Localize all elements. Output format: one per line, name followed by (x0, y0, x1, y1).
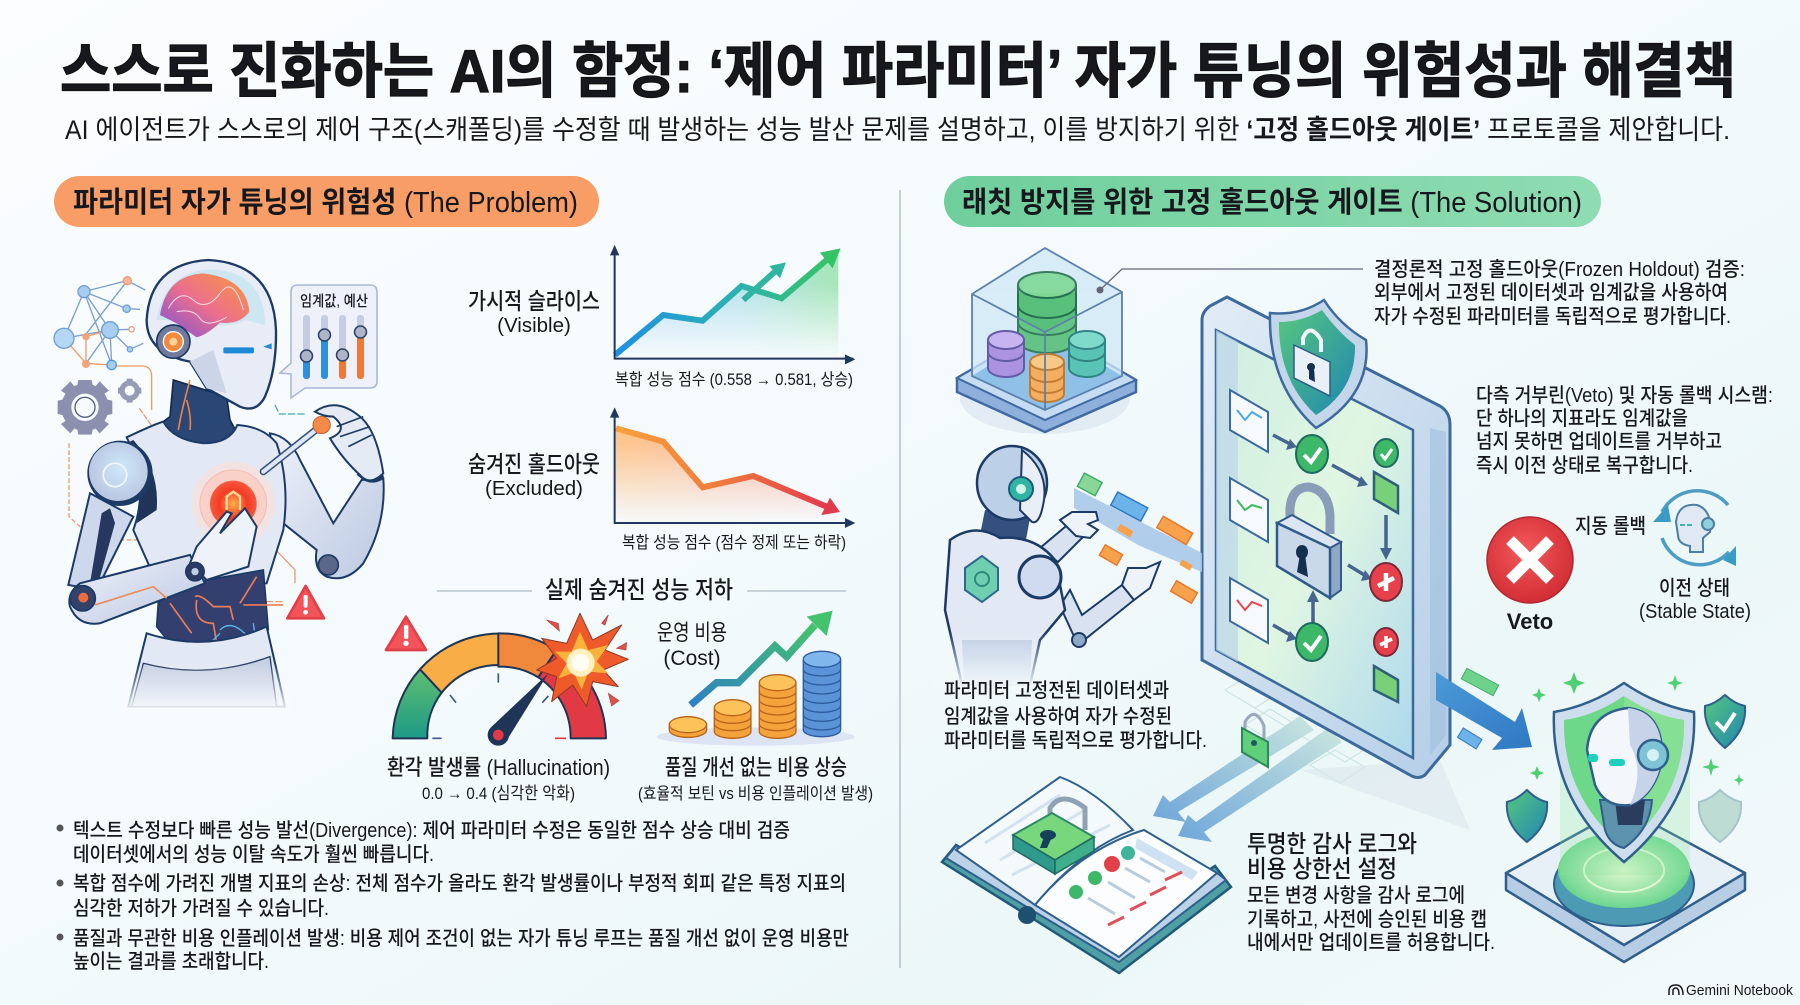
text block: audit log and cost cap: 모든 변경 사항을 감사 로그에 (1247, 884, 1465, 907)
chart: cost coins and rising arrow (657, 611, 855, 746)
text block: audit log and cost cap: 투명한 감사 로그와 (1247, 831, 1417, 858)
platform (1506, 808, 1745, 962)
lock on the page (1013, 799, 1094, 874)
text block: frozen holdout: 외부에서 고정된 데이터셋과 임계값을 사용하여 (1374, 281, 1728, 304)
illustration: audit log book (942, 777, 1231, 973)
near hand (190, 508, 257, 580)
text block: veto and rollback (1476, 384, 1773, 477)
coins: blue stack (803, 651, 841, 737)
database: orange cylinder (1030, 354, 1064, 402)
bottom fade (120, 663, 293, 713)
arm reaching low (1060, 585, 1134, 645)
label: hidden holdout: (Excluded) (485, 477, 583, 500)
reactor core (192, 462, 275, 545)
icon: small green lock (1242, 714, 1268, 767)
robot neck (980, 510, 1030, 545)
bullet 3 (56, 927, 849, 973)
coins: stack 2 (714, 700, 751, 738)
status: red crosses (1370, 563, 1402, 656)
label: previous state: (Stable State) (1639, 601, 1751, 623)
label: visible slice (468, 288, 600, 337)
near upper arm (68, 493, 133, 590)
right page (1035, 830, 1217, 957)
gauge caption: 환각 발생률 (Hallucination) (387, 755, 610, 780)
text block: veto and rollback: 즉시 이전 상태로 복구합니다. (1476, 454, 1693, 477)
shoulder (87, 441, 153, 506)
bullet 1: 데이터셋에서의 성능 이탈 속도가 훨씬 빠릅니다. (73, 843, 434, 866)
bullet 2: 복합 점수에 가려진 개별 지표의 손상: 전체 점수가 올라도 환각 발생률이나 부정적 회피 같은 특정 지표의 (73, 872, 846, 895)
text block: frozen evaluation: 임계값을 사용하여 자가 수정된 (944, 705, 1172, 728)
text block: frozen evaluation: 파라미터를 독립적으로 평가합니다. (944, 729, 1207, 752)
text block: audit log and cost cap: 기록하고, 사전에 승인된 비용 캡 (1247, 908, 1487, 931)
torso (127, 422, 286, 590)
sparkles (1530, 672, 1744, 786)
robot head (977, 446, 1047, 520)
cost caption (638, 755, 873, 803)
icon: neural network (54, 277, 152, 410)
speech bubble: thresholds and budget sliders (280, 285, 377, 398)
chart card 3 (1230, 578, 1268, 643)
big padlock (1277, 487, 1341, 598)
illustration: robot operating the gate (930, 446, 1160, 688)
illustration: robot tuning its own parameters (54, 260, 384, 713)
heading: real hidden degradation: 실제 숨겨진 성능 저하 (545, 577, 733, 604)
gauge caption (387, 755, 610, 803)
text block: veto and rollback: 넘지 못하면 업데이트를 거부하고 (1476, 430, 1722, 453)
label: previous state: 이전 상태 (1659, 577, 1730, 600)
label: visible slice: 가시적 슬라이스 (468, 288, 600, 314)
left page (956, 777, 1133, 905)
pelvis (128, 627, 285, 707)
caption: visible chart: 복합 성능 점수 (0.558 → 0.581, 상승) (615, 370, 853, 389)
database: purple cylinder (988, 331, 1024, 377)
icon: veto (1487, 517, 1573, 603)
flow arrows (1273, 435, 1392, 642)
chart: hidden holdout falling (610, 407, 855, 528)
far arm (270, 433, 384, 578)
text block: frozen holdout: 결정론적 고정 홀드아웃(Frozen Holdout) 검증: (1374, 258, 1745, 281)
needle (488, 673, 548, 746)
database: teal cylinder (1069, 331, 1105, 377)
panel heading: the problem: 파라미터 자가 튜닝의 위험성 (The Problem) (73, 186, 578, 219)
icon: small gear (118, 379, 141, 403)
chart card 1 (1230, 390, 1268, 452)
label: auto rollback: 지동 롤백 (1575, 515, 1646, 538)
text block: audit log and cost cap (1247, 831, 1495, 954)
label: hidden holdout (468, 451, 600, 500)
text block: frozen holdout: 자가 수정된 파라미터를 독립적으로 평가합니다. (1374, 305, 1731, 328)
illustration: protected robot on platform (1506, 672, 1745, 962)
illustration: holographic parameter strip (1074, 473, 1202, 603)
caption: hidden chart: 복합 성능 점수 (점수 정제 또는 하락) (622, 533, 846, 552)
text block: veto and rollback: 단 하나의 지표라도 임계값을 (1476, 407, 1688, 430)
small shield: check (1705, 695, 1745, 748)
status: green checks (1296, 435, 1398, 661)
label: operating cost: (Cost) (663, 647, 721, 670)
cost caption: 품질 개선 없는 비용 상승 (665, 755, 847, 780)
robot head and neck (1587, 708, 1668, 848)
large shield (1554, 683, 1694, 862)
text block: veto and rollback: 다측 거부린(Veto) 및 자동 롤백 시스램: (1476, 384, 1773, 407)
log entries (1069, 846, 1182, 925)
near forearm (69, 555, 205, 624)
panel heading: the solution (944, 176, 1601, 227)
neck (157, 380, 237, 443)
panel heading: the solution: 래칫 방지를 위한 고정 홀드아웃 게이트 (The Solution) (962, 186, 1582, 219)
bullet 3: 품질과 무관한 비용 인플레이션 발생: 비용 제어 조건이 없는 자가 튜닝 루프는 품질 개선 없이 운영 비용만 (73, 927, 849, 950)
arrows to the audit log (1153, 716, 1342, 842)
text block: audit log and cost cap: 비용 상한선 설정 (1247, 856, 1397, 883)
gate shield (1270, 300, 1367, 428)
text block: problem bullets (56, 819, 849, 973)
robot torso (945, 530, 1065, 685)
coins: stack 3 (759, 675, 796, 738)
text block: audit log and cost cap: 내에서만 업데이트를 허용합니다. (1247, 931, 1495, 954)
arrow: gate to deployed robot (1436, 668, 1532, 750)
icon: large gear (58, 380, 112, 435)
icon: explosion (537, 613, 628, 707)
bullet 1 (56, 819, 790, 866)
icon: rollback to previous state (1653, 491, 1736, 566)
faint grid below the gate (1225, 675, 1370, 783)
subtitle: AI 에이전트가 스스로의 제어 구조(스캐폴딩)를 수정할 때 발생하는 성능 발산 문제를 설명하고, 이를 방지하기 위한 ‘고정 홀드아웃 게이트’ 프로토콜을 제안합니다. (65, 115, 1730, 145)
leader line (1100, 269, 1363, 290)
small shield: faded (1699, 790, 1741, 842)
head (147, 260, 276, 409)
bullet 2: 심각한 저하가 가려질 수 있습니다. (73, 897, 329, 920)
illustration: frozen data cube (957, 248, 1136, 434)
bullet 1: 텍스트 수정보다 빠른 성능 발선(Divergence): 제어 파라미터 수정은 동일한 점수 상승 대비 검증 (73, 819, 790, 842)
label: visible slice: (Visible) (497, 314, 571, 337)
warning icon: torso (287, 586, 324, 618)
gauge: hallucination rate (386, 613, 628, 746)
abdomen circuits (157, 570, 283, 650)
label: veto: Veto (1507, 609, 1553, 634)
tuning hand (315, 405, 383, 480)
bullet 2 (56, 872, 846, 920)
label: previous state (1639, 577, 1751, 623)
small shield: left (1507, 790, 1547, 842)
warning icon: gauge (386, 617, 426, 650)
arm reaching high (1040, 516, 1090, 562)
illustration: gate tablet (1202, 297, 1470, 830)
status: green squares (1374, 472, 1398, 513)
panel heading: the problem (54, 176, 599, 227)
tuning stick (263, 416, 330, 472)
text block: frozen holdout (1374, 258, 1745, 328)
text block: frozen evaluation (944, 679, 1207, 752)
chart: visible slice rising (610, 245, 855, 364)
speech bubble: thresholds and budget sliders: 임계값, 예산 (300, 293, 368, 310)
coins: stack 1 (669, 717, 707, 737)
label: hidden holdout: 숨겨진 홀드아웃 (468, 451, 600, 477)
label: operating cost (657, 620, 727, 670)
watermark: Gemini Notebook: Gemini Notebook (1686, 982, 1793, 999)
label: operating cost: 운영 비용 (657, 620, 727, 645)
text block: frozen evaluation: 파라미터 고정전된 데이터셋과 (944, 679, 1169, 702)
cost caption: (효율적 보틴 vs 비용 인플레이션 발생) (638, 784, 873, 803)
chart card 2 (1230, 478, 1268, 542)
gauge caption: 0.0 → 0.4 (심각한 악화) (422, 784, 575, 803)
database: green cylinder (1018, 272, 1076, 353)
bullet 3: 높이는 결과를 초래합니다. (73, 950, 269, 973)
